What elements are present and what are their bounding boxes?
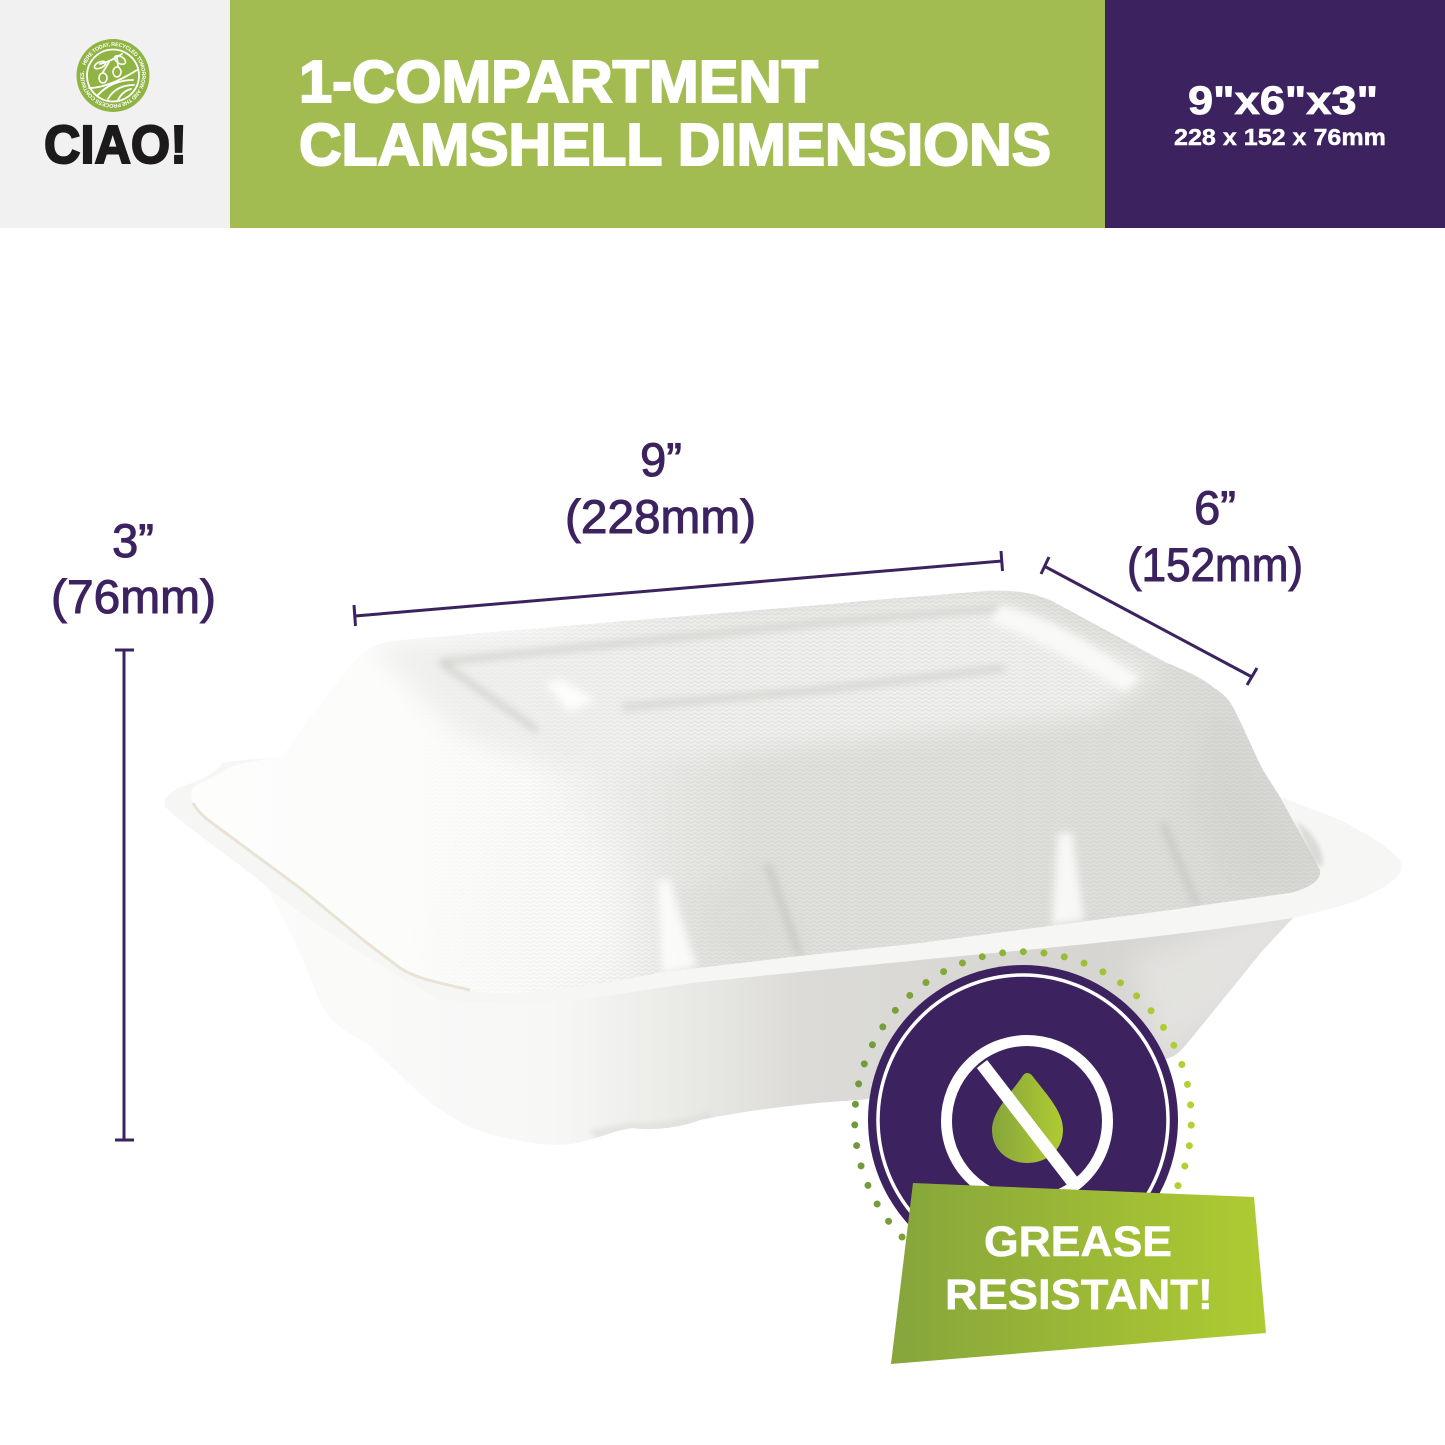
dimension: height label: (76mm): [51, 570, 216, 623]
title panel: [230, 0, 1105, 228]
lid texture: [491, 590, 1320, 991]
dimension: length label: (228mm): [565, 490, 756, 543]
dimension: length arrow: [354, 551, 1002, 626]
dimension: length label: [565, 433, 756, 543]
right flange recess shade: [1296, 820, 1323, 868]
lid top light surface: [392, 595, 1148, 754]
ribbon banner: [891, 1183, 1266, 1364]
banner text line 1: GREASE: [984, 1218, 1172, 1266]
purple disc: [868, 965, 1178, 1275]
badge: grease resistant: [855, 952, 1266, 1364]
clamshell container: [165, 580, 1402, 1145]
title line 2: CLAMSHELL DIMENSIONS: [299, 112, 1051, 178]
logo panel: [0, 0, 230, 228]
icon: Ciao round olive emblem: HERE TODAY, RECYCLED TOMORROW. AND THE PROCESS CONTINUES.: [80, 42, 146, 108]
icon: grease drop: [992, 1073, 1063, 1163]
dimension: width arrow: [1041, 557, 1257, 685]
lid lower-left light surface: [593, 904, 618, 952]
size in millimetres: 228 x 152 x 76mm: [1174, 124, 1386, 150]
dimension: width label: 6”: [1194, 481, 1236, 534]
tray rim: [165, 757, 1402, 1003]
left notch highlight: [658, 880, 697, 974]
dimension: height label: [51, 514, 216, 623]
white inner ring: [878, 975, 1168, 1265]
right notch highlight: [1052, 833, 1084, 925]
icon: prohibition sign: [946, 1040, 1108, 1202]
right notch dark crease: [1163, 823, 1197, 905]
logo wordmark: CIAO!: [44, 115, 187, 175]
size panel: [1105, 0, 1445, 228]
dimension: height label: 3”: [112, 514, 154, 567]
lid right shade: [1190, 700, 1320, 890]
dimension: length label: 9”: [640, 433, 682, 486]
dotted ring: [855, 952, 1191, 1288]
lid left flange edge line: [193, 803, 470, 990]
banner text line 2: RESISTANT!: [945, 1271, 1213, 1319]
dimension: height arrow: [115, 650, 134, 1140]
left notch dark crease: [767, 863, 800, 955]
left notch side shade: [680, 870, 795, 960]
header band: [0, 0, 1445, 228]
lid recess lines: [440, 608, 1005, 730]
size in inches: 9"x6"x3": [1188, 79, 1378, 123]
title line 1: 1-COMPARTMENT: [299, 49, 818, 115]
tray front body: [485, 918, 1293, 1144]
tray rim right flange: [1190, 797, 1402, 918]
lid: [377, 590, 1320, 990]
dimension: width label: [1127, 481, 1303, 591]
dimension: width label: (152mm): [1127, 538, 1303, 591]
lid recess highlights: [548, 680, 592, 712]
